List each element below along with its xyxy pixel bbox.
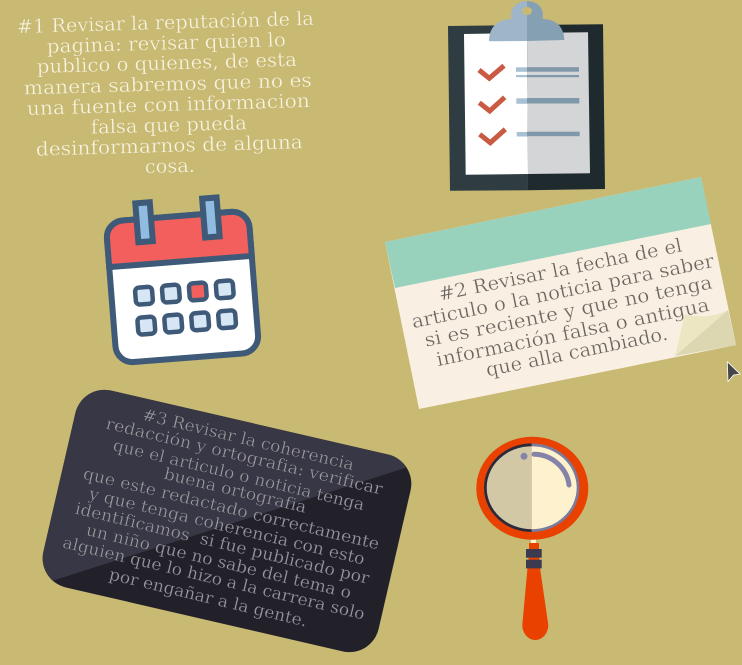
text block: step 3: y que tenga coherencia con esto <box>86 484 367 569</box>
text block: step 3: un niño que no sabe del tema o <box>84 520 353 602</box>
panel: step 2 note card <box>385 177 736 409</box>
text block: step 3: alguien que lo hizo a la carrera solo <box>61 533 367 624</box>
text block: step 1: pagina: revisar quien lo <box>47 29 286 58</box>
text block: step 1: manera sabremos que no es <box>24 69 312 100</box>
text block: step 1: #1 Revisar la reputación de la <box>17 8 314 38</box>
text block: step 2: si es reciente y que no tenga <box>423 272 714 352</box>
text block: step 3: que este redactado correctamente <box>81 464 381 553</box>
text block: step 3: que el articulo o noticia tenga <box>111 436 367 514</box>
text block: step 2: información falsa o antigua <box>434 294 711 371</box>
text block: step 2 <box>410 235 717 381</box>
text block: step 1 <box>17 8 314 178</box>
text block: step 1: desinformarnos de alguna <box>36 131 303 161</box>
text block: step 2: #2 Revisar la fecha de el <box>437 235 684 306</box>
text block: step 3: por engañar a la gente. <box>107 565 309 631</box>
text block: step 1: cosa. <box>145 155 195 178</box>
text block: step 2: que alla cambiado. <box>484 323 670 381</box>
text block: step 3: redacción y ortografia: verificar <box>104 414 385 499</box>
icon: mouse cursor <box>727 362 740 382</box>
icon: calendar <box>104 195 259 363</box>
text block: step 1: falsa que pueda <box>91 112 247 139</box>
text block: step 3: #3 Revisar la coherencia <box>141 405 356 474</box>
icon: clipboard <box>448 1 605 191</box>
panel: step 3 dark card <box>42 390 412 652</box>
icon: magnifying glass <box>476 437 588 640</box>
text block: step 2: articulo o la noticia para saber <box>410 250 717 333</box>
text block: step 3: identificamos si fue publicado por <box>73 499 371 588</box>
text block: step 3: buena ortografia <box>162 464 309 517</box>
text block: step 1: publico o quienes, de esta <box>37 49 297 78</box>
text block: step 3 <box>61 405 385 631</box>
text block: step 1: una fuente con informacion <box>27 90 310 120</box>
